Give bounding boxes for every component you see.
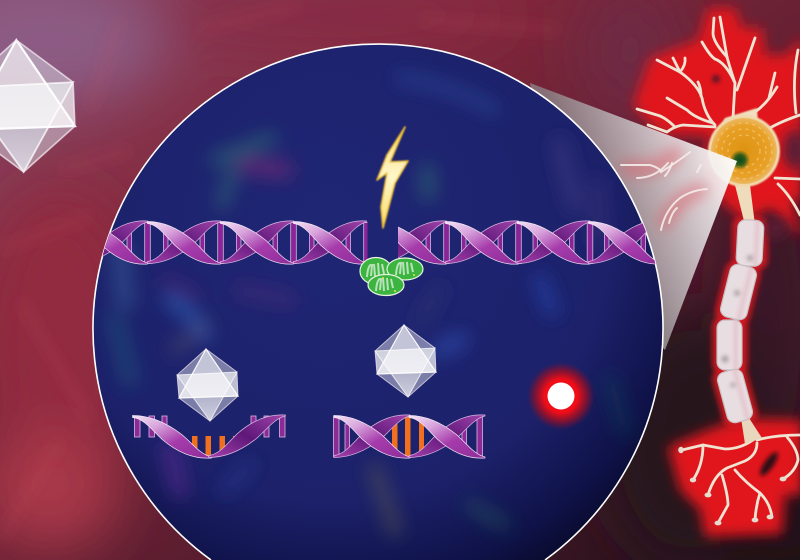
double-stranded DNA with orange bases bbox=[334, 415, 485, 458]
magnifying lens bbox=[93, 44, 663, 560]
single-stranded DNA with orange bases bbox=[133, 415, 285, 458]
neuron bbox=[637, 17, 800, 525]
dendrites and axon terminals bbox=[637, 17, 800, 525]
crystal: above single strand bbox=[177, 349, 238, 421]
lens outline bbox=[93, 44, 663, 560]
zoom cone bbox=[530, 83, 737, 350]
blurred cell contents bbox=[115, 78, 625, 530]
faded dendrites inside cone bbox=[621, 152, 707, 230]
glowing red marker bbox=[527, 362, 595, 430]
nucleus bbox=[730, 150, 750, 170]
crystal: top left bbox=[0, 40, 75, 172]
DNA strand, left part bbox=[74, 221, 369, 264]
crystal: above double strand bbox=[375, 325, 436, 397]
DNA strand, right part bbox=[398, 220, 656, 264]
neuron glow bbox=[633, 8, 800, 537]
protein cluster bbox=[360, 258, 423, 296]
myelin sheaths bbox=[716, 219, 764, 424]
cell body bbox=[708, 115, 780, 187]
lightning bolt bbox=[377, 127, 408, 228]
